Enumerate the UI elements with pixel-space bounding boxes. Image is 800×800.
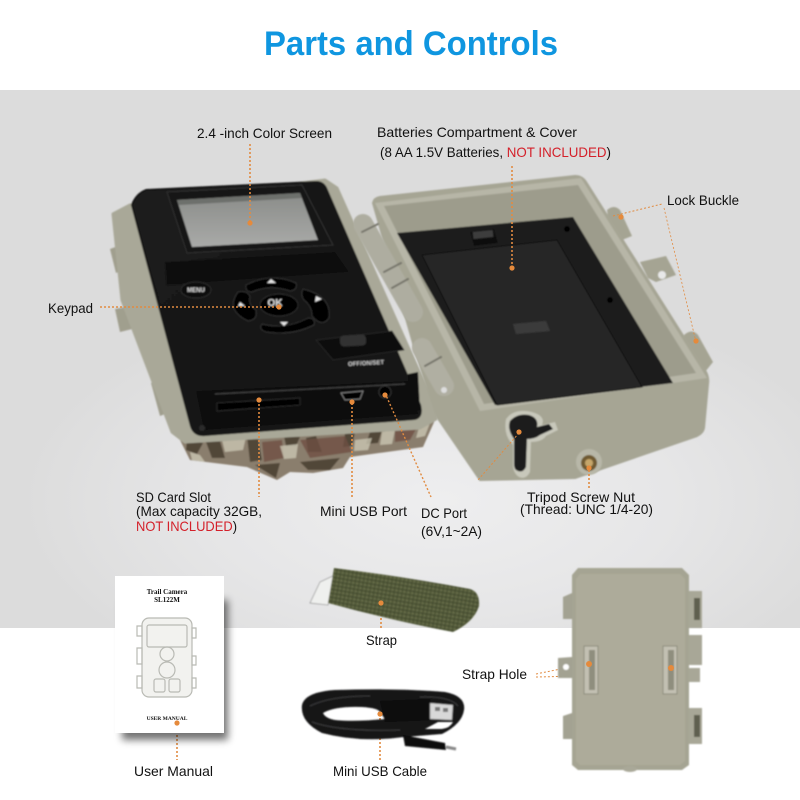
label: batteries compartment: (8 AA 1.5V Batteries, NOT INCLUDED)	[380, 144, 611, 160]
icon: menu button: MENU	[187, 288, 205, 294]
camera front half: control panel	[110, 180, 436, 480]
rear tabs and buckles	[558, 593, 572, 739]
label: DC port: (6V,1~2A)	[421, 523, 482, 539]
manual camera line drawing	[137, 618, 196, 697]
icon: keyhole slot	[505, 411, 558, 478]
label: mini USB port: Mini USB Port	[320, 503, 407, 519]
title: Parts and Controls	[264, 25, 558, 63]
label: lock buckle: Lock Buckle	[667, 192, 739, 208]
mini USB cable	[302, 689, 464, 750]
icon: mini USB port	[341, 391, 363, 400]
label: SD card slot: NOT INCLUDED)	[136, 518, 237, 534]
floor	[397, 217, 673, 405]
icon: power switch	[316, 331, 404, 368]
callout leader lines	[100, 144, 696, 760]
clip	[408, 372, 420, 412]
callout dots	[247, 214, 699, 471]
camera rear view	[558, 568, 702, 772]
label: batteries compartment: Batteries Compartment & Cover	[377, 124, 577, 140]
label: SD card slot: (Max capacity 32GB,	[136, 503, 262, 519]
icon: USB cable callout	[377, 711, 383, 717]
shell rim	[113, 180, 436, 442]
icon: power switch: OFF/ON/SET	[348, 360, 385, 368]
bottom ledge	[196, 381, 418, 430]
icon: SD card slot	[217, 398, 300, 411]
label: keypad: Keypad	[48, 300, 93, 316]
label: DC port: DC Port	[421, 505, 467, 521]
label: tripod screw nut: Tripod Screw Nut	[527, 489, 635, 505]
strap slots	[584, 646, 598, 694]
label: user manual: User Manual	[134, 763, 213, 779]
label: SD card slot	[136, 489, 262, 534]
user manual booklet: SL122M	[154, 596, 180, 604]
icon: menu button	[181, 282, 211, 298]
label: tripod screw nut	[520, 489, 653, 517]
label: strap hole: Strap Hole	[462, 666, 527, 682]
camo lower band	[175, 420, 435, 480]
label: SD card slot: SD Card Slot	[136, 489, 211, 505]
label: DC port	[421, 505, 482, 539]
icon: tripod screw nut	[576, 449, 602, 475]
strap hole callout dots	[586, 661, 674, 671]
label: LCD screen: 2.4 -inch Color Screen	[197, 125, 332, 141]
manual callout	[174, 720, 180, 726]
inner wall	[384, 185, 696, 404]
body top lift	[165, 252, 349, 285]
label: tripod screw nut: (Thread: UNC 1/4-20)	[520, 501, 653, 517]
camera back half: battery compartment	[373, 176, 713, 480]
strap callout	[378, 600, 384, 606]
strap	[310, 568, 479, 632]
rear body	[572, 568, 689, 770]
user manual booklet: Trail Camera	[147, 588, 188, 596]
icon: keypad	[233, 278, 329, 333]
outer wall	[373, 176, 708, 480]
rim highlight	[375, 178, 707, 411]
right-side buckles and tab	[607, 207, 713, 372]
user manual booklet	[115, 576, 228, 740]
label: batteries compartment	[377, 124, 611, 160]
left tabs	[110, 245, 175, 416]
label: strap: Strap	[366, 632, 397, 648]
label: mini USB cable: Mini USB Cable	[333, 763, 427, 779]
icon: DC port	[379, 386, 391, 398]
icon: LCD bezel and screen	[167, 185, 333, 253]
battery cover	[422, 240, 642, 405]
user manual booklet: USER MANUAL	[147, 716, 188, 722]
latch	[470, 229, 498, 246]
cover grip	[513, 321, 550, 334]
icon: keypad: OK	[268, 298, 283, 309]
black body	[132, 182, 421, 435]
background band	[0, 90, 800, 628]
hinge	[362, 224, 447, 393]
